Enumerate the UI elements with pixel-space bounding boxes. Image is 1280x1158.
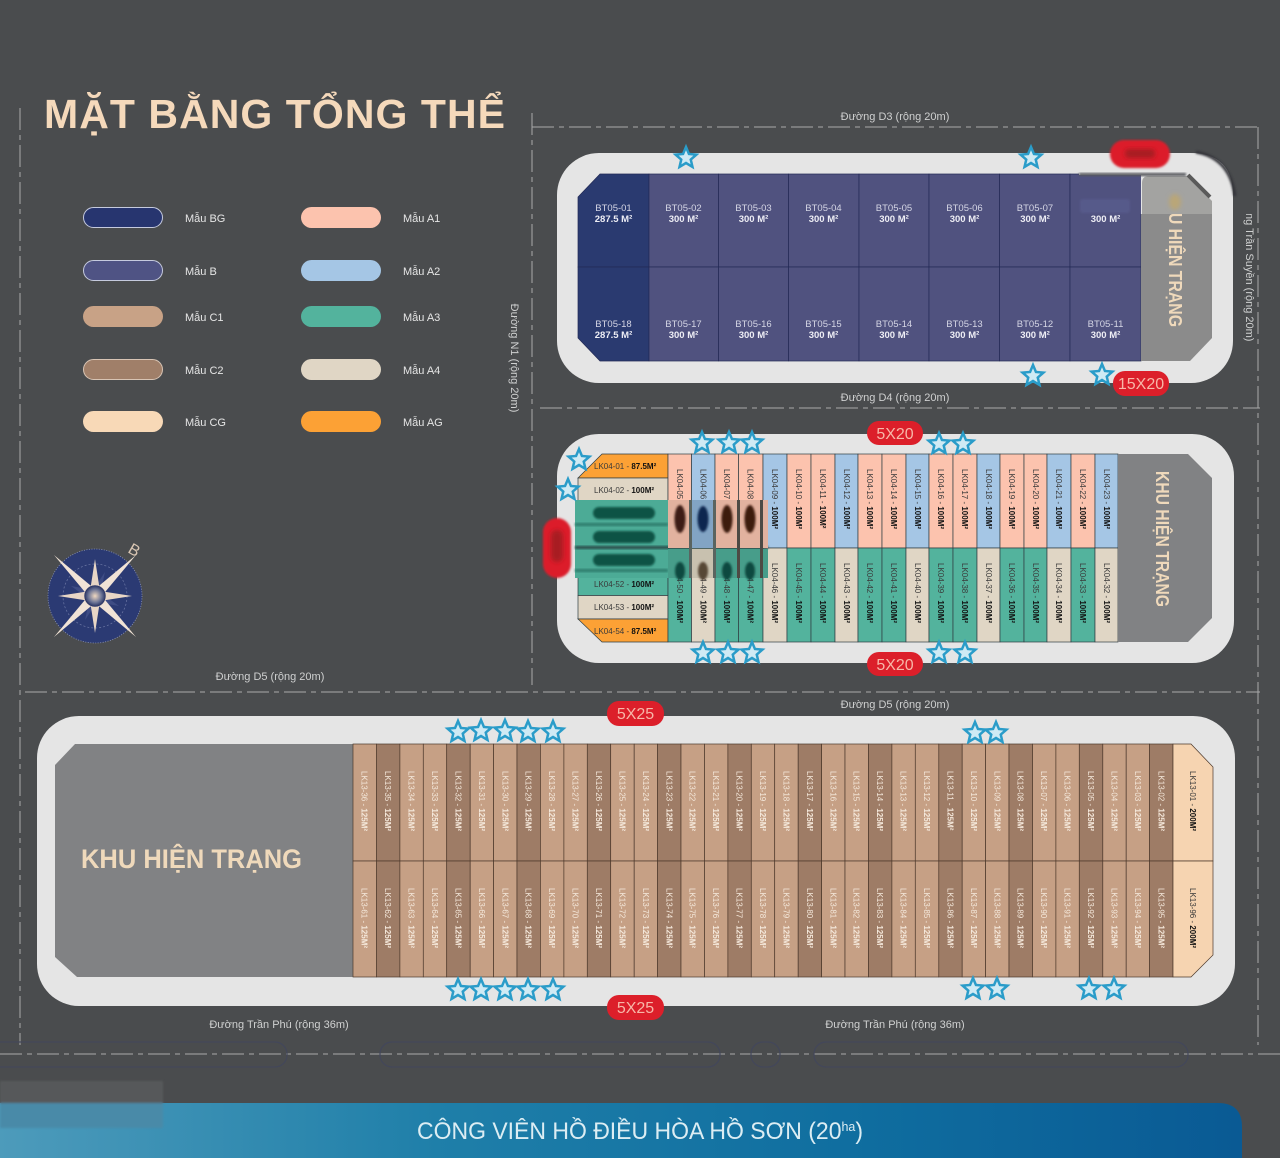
lots LK04-22 / LK04-33: LK04-33 - 100M²	[1078, 563, 1087, 623]
lots LK13-13 / LK13-84: LK13-13 - 125M²	[899, 771, 908, 831]
lots LK13-14 / LK13-83: LK13-14 - 125M²	[875, 771, 884, 831]
plot BT05-07: BT05-07	[1017, 203, 1053, 214]
lots LK13-25 / LK13-72	[611, 744, 634, 977]
lots LK13-04 / LK13-93: LK13-93 - 125M²	[1110, 888, 1119, 948]
plot BT05-14: 300 M²	[879, 330, 909, 341]
lots LK13-03 / LK13-94: LK13-03 - 125M²	[1133, 771, 1142, 831]
lots LK04-11 / LK04-44: LK04-11 - 100M²	[818, 469, 827, 529]
plot LK04-02	[578, 478, 668, 502]
plot BT05-15	[788, 267, 859, 361]
plots: hidden rows	[578, 502, 668, 572]
lots LK04-21 / LK04-34: LK04-21 - 100M²	[1054, 469, 1063, 529]
plot BT05-14	[859, 267, 929, 361]
lots LK13-15 / LK13-82	[845, 744, 868, 977]
icon: compass	[48, 541, 143, 643]
plot LK04-54: LK04-54 - 87.5M²	[594, 627, 657, 636]
lots LK13-15 / LK13-82: LK13-15 - 125M²	[852, 771, 861, 831]
lots LK04-13 / LK04-42: LK04-13 - 100M²	[865, 469, 874, 529]
legend item: Mẫu B: Mẫu B	[185, 265, 217, 278]
lots LK04-14 / LK04-41: LK04-14 - 100M²	[889, 469, 898, 529]
lots LK04-18 / LK04-37	[977, 454, 1000, 642]
lots LK13-33 / LK13-64	[423, 744, 447, 977]
lots LK13-35 / LK13-62: LK13-35 - 125M²	[383, 771, 392, 831]
plot BT05-01: BT05-01	[595, 203, 632, 214]
lots LK13-20 / LK13-77	[728, 744, 751, 977]
lots LK13-19 / LK13-78: LK13-78 - 125M²	[758, 888, 767, 948]
panel: block BT05	[557, 136, 1257, 396]
lots LK13-23 / LK13-74: LK13-23 - 125M²	[664, 771, 673, 831]
badge: 15X20: 15X20	[1118, 376, 1164, 393]
lots LK13-08 / LK13-89	[1009, 744, 1032, 977]
existing area LK13: KHU HIỆN TRẠNG	[81, 843, 302, 874]
lots LK04-20 / LK04-35: LK04-20 - 100M²	[1031, 469, 1040, 529]
plot BT05-13	[929, 267, 1000, 361]
lots LK04-07 / LK04-48: LK04-48 - 100M²	[722, 563, 731, 623]
lots LK13-36 / LK13-61: LK13-36 - 125M²	[360, 771, 369, 831]
plot BT05-12	[1000, 267, 1070, 361]
lots LK13-06 / LK13-91: LK13-91 - 125M²	[1063, 888, 1072, 948]
plot BT05-02: BT05-02	[665, 203, 702, 214]
lots LK13-30 / LK13-67: LK13-67 - 125M²	[500, 888, 509, 948]
legend item: Mẫu A1: Mẫu A1	[403, 212, 440, 225]
lots LK13-32 / LK13-65: LK13-65 - 125M²	[453, 888, 462, 948]
lots LK13-18 / LK13-79	[775, 744, 798, 977]
existing area LK04: KHU HIỆN TRẠNG	[1152, 471, 1173, 607]
plot BT05-03	[718, 174, 788, 267]
lots LK13-25 / LK13-72: LK13-72 - 125M²	[617, 888, 626, 948]
road median outlines	[0, 1042, 1188, 1067]
lots LK13-18 / LK13-79: LK13-18 - 125M²	[781, 771, 790, 831]
lots LK04-23 / LK04-32	[1095, 454, 1118, 642]
lots LK13-33 / LK13-64: LK13-64 - 125M²	[430, 888, 439, 948]
plot BT05-16: BT05-16	[735, 319, 772, 330]
plot LK04-01	[578, 454, 668, 478]
lots LK04-11 / LK04-44: LK04-44 - 100M²	[818, 563, 827, 623]
lots LK13-32 / LK13-65	[447, 744, 470, 977]
lots LK13-27 / LK13-70	[564, 744, 587, 977]
plot BT05-02	[649, 174, 718, 267]
plot BT05-05: 300 M²	[879, 214, 909, 225]
lots LK04-05 / LK04-50: LK04-50 - 100M²	[675, 563, 684, 623]
badge: 5X25 top: 5X25	[617, 706, 654, 723]
lots LK13-33 / LK13-64: LK13-33 - 125M²	[430, 771, 439, 831]
legend item: Mẫu A2	[301, 260, 440, 281]
plot BT05-15: BT05-15	[805, 319, 842, 330]
lots LK13-08 / LK13-89: LK13-08 - 125M²	[1016, 771, 1025, 831]
plot BT05-03: 300 M²	[739, 214, 768, 225]
plot BT05-15: 300 M²	[809, 330, 838, 341]
lots LK13-24 / LK13-73: LK13-73 - 125M²	[641, 888, 650, 948]
lots LK13-02 / LK13-95: LK13-95 - 125M²	[1156, 888, 1165, 948]
lots LK04-08 / LK04-47: LK04-47 - 100M²	[746, 563, 754, 623]
park label: )	[855, 1118, 863, 1145]
lots LK13-23 / LK13-74: LK13-74 - 125M²	[664, 888, 673, 948]
lots LK13-29 / LK13-68	[517, 744, 540, 977]
lots LK04-19 / LK04-36: LK04-36 - 100M²	[1007, 563, 1016, 623]
road label: Trần Phú left: Đường Trần Phú (rộng 36m)	[209, 1019, 349, 1031]
plot BT05-04: 300 M²	[809, 214, 838, 225]
badge: 5X25 bottom: 5X25	[617, 1000, 654, 1017]
legend item: Mẫu BG	[84, 208, 225, 228]
lots LK04-16 / LK04-39	[929, 454, 953, 642]
lots LK13-17 / LK13-80: LK13-17 - 125M²	[805, 771, 814, 831]
badge: 15X20	[1113, 371, 1169, 396]
lots LK04-10 / LK04-45	[787, 454, 811, 642]
park label: ha	[841, 1119, 856, 1134]
lots LK04-22 / LK04-33: LK04-22 - 100M²	[1078, 469, 1087, 529]
lots LK13-21 / LK13-76: LK13-76 - 125M²	[711, 888, 720, 948]
lots LK13-07 / LK13-90: LK13-07 - 125M²	[1039, 771, 1048, 831]
road label: N1: Đường N1 (rộng 20m)	[508, 304, 520, 412]
lots LK13-26 / LK13-71: LK13-26 - 125M²	[594, 771, 603, 831]
legend item: Mẫu CG	[83, 411, 226, 432]
road label: D5 right: Đường D5 (rộng 20m)	[841, 699, 949, 711]
plot BT05-14: BT05-14	[876, 319, 912, 330]
panel: block LK04	[543, 421, 1234, 676]
lots LK13-31 / LK13-66: LK13-66 - 125M²	[477, 888, 486, 948]
plot BT05-17: 300 M²	[669, 330, 698, 341]
plot LK04-02: LK04-02 - 100M²	[594, 486, 654, 495]
blurred patch: bottom left	[0, 1081, 163, 1128]
lots LK04-16 / LK04-39: LK04-39 - 100M²	[936, 563, 945, 623]
road ring LK13	[37, 716, 1235, 1006]
plot BT05-16: 300 M²	[739, 330, 768, 341]
lots LK13-11 / LK13-86: LK13-11 - 125M²	[945, 771, 954, 831]
lots LK04-12 / LK04-43: LK04-43 - 100M²	[842, 563, 851, 623]
legend item: Mẫu A2: Mẫu A2	[403, 265, 440, 278]
plot BT05-11	[1070, 267, 1141, 361]
plot BT05-02: 300 M²	[669, 214, 698, 225]
lots LK13-24 / LK13-73: LK13-24 - 125M²	[641, 771, 650, 831]
plot BT05-12: 300 M²	[1020, 330, 1050, 341]
legend item: Mẫu AG	[301, 411, 443, 432]
lots LK04-17 / LK04-38: LK04-38 - 100M²	[960, 563, 969, 623]
lots LK13-29 / LK13-68: LK13-29 - 125M²	[524, 771, 533, 831]
lots LK13-10 / LK13-87: LK13-10 - 125M²	[969, 771, 978, 831]
lots LK13-09 / LK13-88: LK13-09 - 125M²	[992, 771, 1001, 831]
lots LK04-23 / LK04-32: LK04-32 - 100M²	[1102, 563, 1111, 623]
title: MẶT BẰNG TỔNG THỂ	[44, 90, 505, 137]
park label: CÔNG VIÊN HỒ ĐIỀU HÒA HỒ SƠN (20	[417, 1118, 860, 1145]
lots LK13-05 / LK13-92: LK13-92 - 125M²	[1086, 888, 1095, 948]
lots LK13-23 / LK13-74	[658, 744, 681, 977]
plot BT05-03: BT05-03	[735, 203, 772, 214]
road ring BT05	[557, 153, 1233, 383]
lots LK13-35 / LK13-62	[376, 744, 400, 977]
plot BT05-06: 300 M²	[950, 214, 979, 225]
lots LK04-08 / LK04-47: LK04-08 - 100M²	[746, 469, 754, 529]
lots LK13-25 / LK13-72: LK13-25 - 125M²	[617, 771, 626, 831]
lots LK13-28 / LK13-69: LK13-69 - 125M²	[547, 888, 556, 948]
legend item: Mẫu AG: Mẫu AG	[403, 416, 443, 429]
legend item: Mẫu A3: Mẫu A3	[403, 311, 440, 324]
plot BT05-08	[1070, 174, 1141, 267]
legend item: Mẫu C2	[84, 360, 224, 380]
lots LK13-17 / LK13-80: LK13-80 - 125M²	[805, 888, 814, 948]
lots LK04-15 / LK04-40: LK04-40 - 100M²	[913, 563, 922, 623]
lots LK13-16 / LK13-81: LK13-16 - 125M²	[828, 771, 837, 831]
icons: corner-lot stars	[448, 147, 1124, 999]
lots LK13-11 / LK13-86: LK13-86 - 125M²	[945, 888, 954, 948]
plot BT05-17	[649, 267, 718, 361]
plot LK04-52	[578, 572, 668, 596]
badge: 5X20 bottom: 5X20	[876, 657, 914, 674]
lots LK13-07 / LK13-90: LK13-90 - 125M²	[1039, 888, 1048, 948]
lots LK13-04 / LK13-93: LK13-04 - 125M²	[1110, 771, 1119, 831]
lots LK04-15 / LK04-40	[906, 454, 929, 642]
plot LK13-96	[1173, 861, 1213, 977]
lots LK04-06 / LK04-49	[692, 454, 715, 642]
lots LK13-22 / LK13-75: LK13-75 - 125M²	[688, 888, 697, 948]
legend item: Mẫu CG: Mẫu CG	[185, 416, 226, 429]
lots LK04-12 / LK04-43: LK04-12 - 100M²	[842, 469, 851, 529]
lots LK13-34 / LK13-63	[400, 744, 423, 977]
lots LK04-14 / LK04-41: LK04-41 - 100M²	[889, 563, 898, 623]
lots LK04-18 / LK04-37: LK04-37 - 100M²	[984, 563, 993, 623]
lots LK13-12 / LK13-85	[915, 744, 939, 977]
lots LK13-07 / LK13-90	[1032, 744, 1056, 977]
plot BT05-18: 287.5 M²	[595, 330, 632, 341]
lots LK13-12 / LK13-85: LK13-12 - 125M²	[922, 771, 931, 831]
lots LK13-02 / LK13-95: LK13-02 - 125M²	[1156, 771, 1165, 831]
lots LK04-07 / LK04-48: LK04-07 - 100M²	[722, 469, 731, 529]
legend item: Mẫu B	[84, 260, 217, 280]
plot LK04-54	[578, 619, 668, 642]
blurred patch: top right corner	[1079, 136, 1257, 214]
plot BT05-04	[788, 174, 859, 267]
badge: 5X25 bottom	[607, 995, 664, 1020]
lots LK13-17 / LK13-80	[798, 744, 822, 977]
lots LK13-36 / LK13-61: LK13-61 - 125M²	[360, 888, 369, 948]
legend	[83, 207, 443, 432]
lots LK13-35 / LK13-62: LK13-62 - 125M²	[383, 888, 392, 948]
icon: compass: B	[125, 541, 143, 561]
lots LK04-20 / LK04-35: LK04-35 - 100M²	[1031, 563, 1040, 623]
road label: D5 left: Đường D5 (rộng 20m)	[216, 671, 324, 683]
lots LK13-34 / LK13-63: LK13-34 - 125M²	[407, 771, 416, 831]
lots LK13-13 / LK13-84	[892, 744, 915, 977]
plot BT05-18	[578, 267, 649, 361]
lots LK13-36 / LK13-61	[353, 744, 376, 977]
lots LK13-27 / LK13-70: LK13-27 - 125M²	[571, 771, 580, 831]
plot BT05-08: 300 M²	[1091, 214, 1120, 225]
badge: 5X20 top: 5X20	[876, 426, 914, 443]
badge: blurred left	[543, 518, 571, 578]
lots LK13-13 / LK13-84: LK13-84 - 125M²	[899, 888, 908, 948]
lots LK13-10 / LK13-87	[962, 744, 986, 977]
lots LK13-06 / LK13-91: LK13-06 - 125M²	[1063, 771, 1072, 831]
existing area BT05	[1141, 174, 1212, 361]
plot BT05-05	[859, 174, 929, 267]
lots LK13-28 / LK13-69: LK13-28 - 125M²	[547, 771, 556, 831]
lots LK13-30 / LK13-67	[494, 744, 517, 977]
plot BT05-13: BT05-13	[946, 319, 983, 330]
badge: 5X20 bottom	[867, 652, 923, 676]
lots LK13-03 / LK13-94: LK13-94 - 125M²	[1133, 888, 1142, 948]
road ring LK04	[557, 434, 1234, 663]
lots LK04-09 / LK04-46: LK04-09 - 100M²	[770, 469, 779, 529]
lots LK04-10 / LK04-45: LK04-45 - 100M²	[794, 563, 803, 623]
lots LK04-13 / LK04-42	[858, 454, 882, 642]
existing area BT05: KHU HIỆN TRẠNG	[1165, 190, 1186, 327]
lots LK04-15 / LK04-40: LK04-15 - 100M²	[913, 469, 922, 529]
plot LK04-01: LK04-01 - 87.5M²	[594, 462, 657, 471]
lots LK13-16 / LK13-81	[822, 744, 845, 977]
lots LK13-31 / LK13-66	[470, 744, 494, 977]
plot LK13-96: LK13-96 - 200M²	[1188, 888, 1197, 948]
lots LK04-21 / LK04-34: LK04-34 - 100M²	[1054, 563, 1063, 623]
road label: D4: Đường D4 (rộng 20m)	[841, 392, 949, 404]
legend item: Mẫu C1: Mẫu C1	[185, 311, 224, 324]
lots LK04-21 / LK04-34	[1047, 454, 1071, 642]
plot LK04-52: LK04-52 - 100M²	[594, 580, 654, 589]
plot BT05-04: BT05-04	[805, 203, 842, 214]
plot BT05-06	[929, 174, 1000, 267]
lots LK04-08 / LK04-47	[738, 454, 763, 642]
lots LK13-19 / LK13-78: LK13-19 - 125M²	[758, 771, 767, 831]
lots LK13-26 / LK13-71	[587, 744, 611, 977]
legend item: Mẫu A1	[301, 207, 440, 228]
lots LK04-05 / LK04-50: LK04-05 - 100M²	[675, 469, 684, 529]
lots LK13-05 / LK13-92: LK13-05 - 125M²	[1086, 771, 1095, 831]
plot BT05-08: BT05-08	[1087, 203, 1124, 214]
panel: lake park	[0, 1081, 1242, 1158]
lots LK13-15 / LK13-82: LK13-82 - 125M²	[852, 888, 861, 948]
lots LK13-05 / LK13-92	[1079, 744, 1103, 977]
plot BT05-06: BT05-06	[946, 203, 983, 214]
lots LK13-24 / LK13-73	[634, 744, 658, 977]
lots LK13-09 / LK13-88: LK13-88 - 125M²	[992, 888, 1001, 948]
lots LK04-10 / LK04-45: LK04-10 - 100M²	[794, 469, 803, 529]
plot BT05-01	[578, 174, 649, 267]
lots LK13-21 / LK13-76	[704, 744, 728, 977]
plot BT05-13: 300 M²	[950, 330, 979, 341]
lots LK13-20 / LK13-77: LK13-20 - 125M²	[735, 771, 744, 831]
plot BT05-07: 300 M²	[1020, 214, 1050, 225]
road labels	[209, 111, 1255, 1031]
lots LK13-20 / LK13-77: LK13-77 - 125M²	[735, 888, 744, 948]
lots LK04-06 / LK04-49: LK04-06 - 100M²	[698, 469, 708, 529]
existing area LK04	[1118, 454, 1212, 642]
plot BT05-07	[1000, 174, 1070, 267]
plot BT05-12: BT05-12	[1017, 319, 1053, 330]
plot BT05-01: 287.5 M²	[595, 214, 632, 225]
lots LK13-29 / LK13-68: LK13-68 - 125M²	[524, 888, 533, 948]
badge: 5X25 top	[607, 701, 664, 726]
legend item: Mẫu C1	[83, 306, 224, 327]
plot BT05-18: BT05-18	[595, 319, 632, 330]
lots LK04-12 / LK04-43	[835, 454, 858, 642]
road label: D3: Đường D3 (rộng 20m)	[841, 111, 949, 123]
lots LK13-19 / LK13-78	[751, 744, 775, 977]
badge: blurred	[1110, 140, 1170, 168]
plot LK13-01: LK13-01 - 200M²	[1188, 771, 1197, 831]
plot LK04-53	[578, 596, 668, 619]
lots LK13-11 / LK13-86	[939, 744, 962, 977]
lots LK13-18 / LK13-79: LK13-79 - 125M²	[781, 888, 790, 948]
lots LK13-30 / LK13-67: LK13-30 - 125M²	[500, 771, 509, 831]
lots LK04-16 / LK04-39: LK04-16 - 100M²	[936, 469, 945, 529]
lots LK04-09 / LK04-46: LK04-46 - 100M²	[770, 563, 779, 623]
lots LK13-10 / LK13-87: LK13-87 - 125M²	[969, 888, 978, 948]
lots LK04-19 / LK04-36: LK04-19 - 100M²	[1007, 469, 1016, 529]
plot BT05-11: BT05-11	[1088, 319, 1123, 330]
plot BT05-11: 300 M²	[1091, 330, 1120, 341]
lots LK13-03 / LK13-94	[1126, 744, 1150, 977]
lots LK13-31 / LK13-66: LK13-31 - 125M²	[477, 771, 486, 831]
lots LK04-06 / LK04-49: LK04-49 - 100M²	[698, 563, 708, 623]
legend item: Mẫu BG: Mẫu BG	[185, 212, 225, 225]
lots LK13-28 / LK13-69	[540, 744, 564, 977]
lots LK13-26 / LK13-71: LK13-71 - 125M²	[594, 888, 603, 948]
lots LK13-32 / LK13-65: LK13-32 - 125M²	[453, 771, 462, 831]
lots LK04-23 / LK04-32: LK04-23 - 100M²	[1102, 469, 1111, 529]
lots LK13-02 / LK13-95	[1150, 744, 1173, 977]
lots LK04-14 / LK04-41	[882, 454, 906, 642]
lots LK04-05 / LK04-50	[668, 454, 692, 642]
lots LK04-20 / LK04-35	[1024, 454, 1047, 642]
lots LK13-22 / LK13-75: LK13-22 - 125M²	[688, 771, 697, 831]
legend item: Mẫu A3	[301, 306, 440, 327]
road label: Trần Phú right: Đường Trần Phú (rộng 36m)	[825, 1019, 965, 1031]
lots LK13-21 / LK13-76: LK13-21 - 125M²	[711, 771, 720, 831]
lots LK13-16 / LK13-81: LK13-81 - 125M²	[828, 888, 837, 948]
existing area LK13	[55, 744, 353, 977]
lots LK13-08 / LK13-89: LK13-89 - 125M²	[1016, 888, 1025, 948]
lots LK04-19 / LK04-36	[1000, 454, 1024, 642]
legend item: Mẫu A4	[301, 359, 440, 380]
badge: 5X20 top	[867, 421, 923, 445]
lots LK13-09 / LK13-88	[986, 744, 1009, 977]
plot BT05-16	[718, 267, 788, 361]
lots LK04-17 / LK04-38	[953, 454, 977, 642]
lots LK13-06 / LK13-91	[1056, 744, 1079, 977]
lots LK13-27 / LK13-70: LK13-70 - 125M²	[571, 888, 580, 948]
lots LK13-04 / LK13-93	[1103, 744, 1126, 977]
lots LK04-11 / LK04-44	[811, 454, 835, 642]
lots LK13-34 / LK13-63: LK13-63 - 125M²	[407, 888, 416, 948]
blurred patch: left mosaic	[575, 500, 768, 580]
lots LK13-22 / LK13-75	[681, 744, 704, 977]
lots LK04-09 / LK04-46	[763, 454, 787, 642]
lots LK04-18 / LK04-37: LK04-18 - 100M²	[984, 469, 993, 529]
lots LK13-12 / LK13-85: LK13-85 - 125M²	[922, 888, 931, 948]
lots LK04-22 / LK04-33	[1071, 454, 1095, 642]
plot LK04-53: LK04-53 - 100M²	[594, 603, 654, 612]
lots LK04-07 / LK04-48	[715, 454, 738, 642]
lots LK13-14 / LK13-83: LK13-83 - 125M²	[875, 888, 884, 948]
lots LK04-13 / LK04-42: LK04-42 - 100M²	[865, 563, 874, 623]
plot BT05-17: BT05-17	[665, 319, 702, 330]
road label: Trần Suyền: Đường Trần Suyền (rộng 20m)	[1243, 191, 1255, 341]
lots LK04-17 / LK04-38: LK04-17 - 100M²	[960, 469, 969, 529]
plot BT05-05: BT05-05	[876, 203, 912, 214]
plot LK13-01	[1173, 744, 1213, 861]
legend item: Mẫu A4: Mẫu A4	[403, 364, 440, 377]
lots LK13-14 / LK13-83	[868, 744, 892, 977]
legend item: Mẫu C2: Mẫu C2	[185, 364, 224, 377]
panel: block LK13	[37, 701, 1235, 1020]
